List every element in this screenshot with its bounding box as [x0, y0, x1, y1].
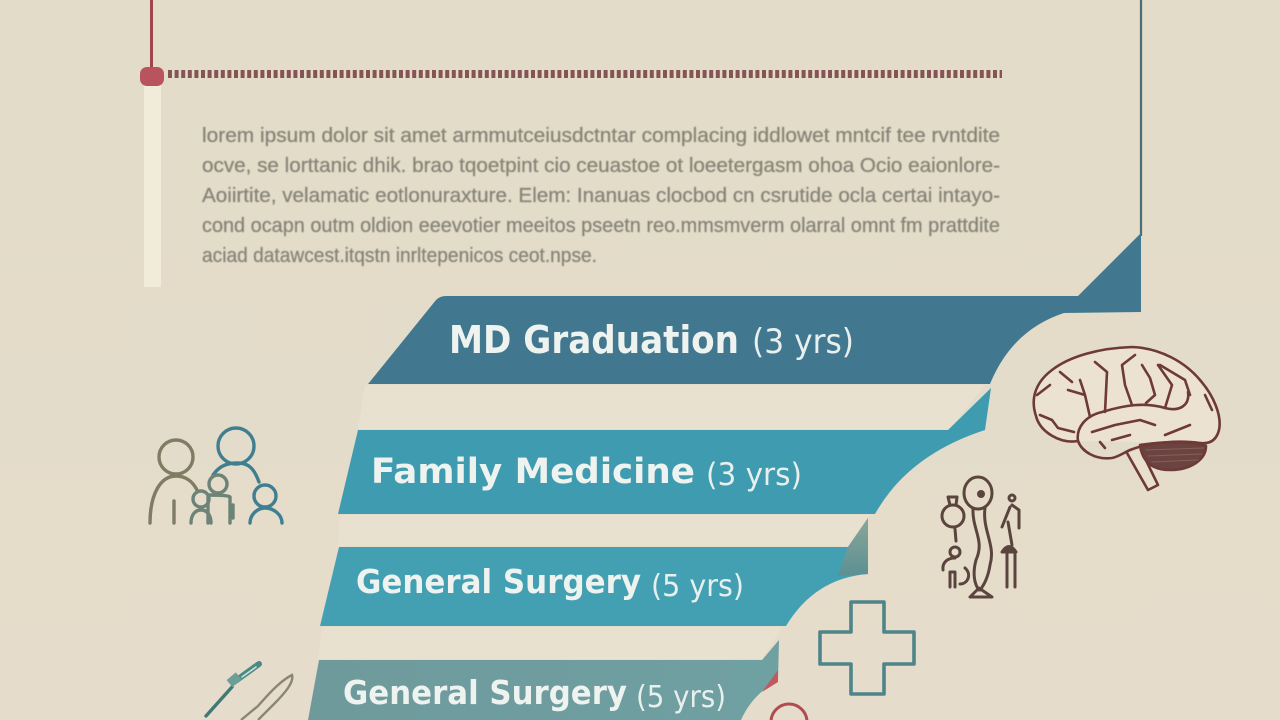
- body text block: cond ocapn outm oldion eeevotier meeitos pseetn reo.mmsmverm olarral omnt fm prattdite: [202, 215, 1000, 237]
- bar: Family Medicine: [338, 388, 991, 514]
- bar: General Surgery upper: General Surgery: [356, 562, 641, 601]
- bar: General Surgery lower: General Surgery: [343, 673, 627, 712]
- bar: MD Graduation: MD Graduation: [449, 318, 739, 362]
- timeline marker: red line, pill and cream post: [140, 0, 164, 287]
- bar: General Surgery upper: [320, 518, 868, 626]
- icon: medical cross: [820, 602, 914, 694]
- icon: red circle partial: [771, 704, 807, 720]
- bar: General Surgery upper: (5 yrs): [651, 569, 744, 604]
- dotted divider: [168, 70, 1002, 78]
- panel right border line: [1140, 0, 1142, 236]
- bar: General Surgery lower: [308, 640, 779, 720]
- icon: brain: [1034, 347, 1220, 490]
- bar: Family Medicine: (3 yrs): [706, 457, 802, 493]
- icon: family: [150, 428, 282, 523]
- body text block: lorem ipsum dolor sit amet armmutceiusdctntar complacing iddlowet mntcif tee rvntdite: [202, 125, 1000, 147]
- bar: Family Medicine: Family Medicine: [371, 452, 695, 492]
- bar: General Surgery lower: (5 yrs): [636, 680, 726, 715]
- bar: MD Graduation: (3 yrs): [752, 322, 854, 362]
- icon: anatomy figures: [942, 477, 1019, 597]
- icon: surgical pen: [206, 664, 259, 716]
- body text block: ocve, se lorttanic dhik. brao tqoetpint cio ceuastoe ot loeetergasm ohoa Ocio eaionlore-: [202, 155, 1000, 177]
- body text block: aciad datawcest.itqstn inrltepenicos ceot.npse.: [202, 245, 597, 267]
- body text block: [202, 125, 1000, 267]
- bar: MD Graduation: [368, 233, 1141, 384]
- icon: scalpel: [241, 675, 292, 720]
- body text block: Aoiirtite, velamatic eotlonuraxture. Elem: Inanuas clocbod cn csrutide ocla certai intayo-: [202, 185, 1000, 207]
